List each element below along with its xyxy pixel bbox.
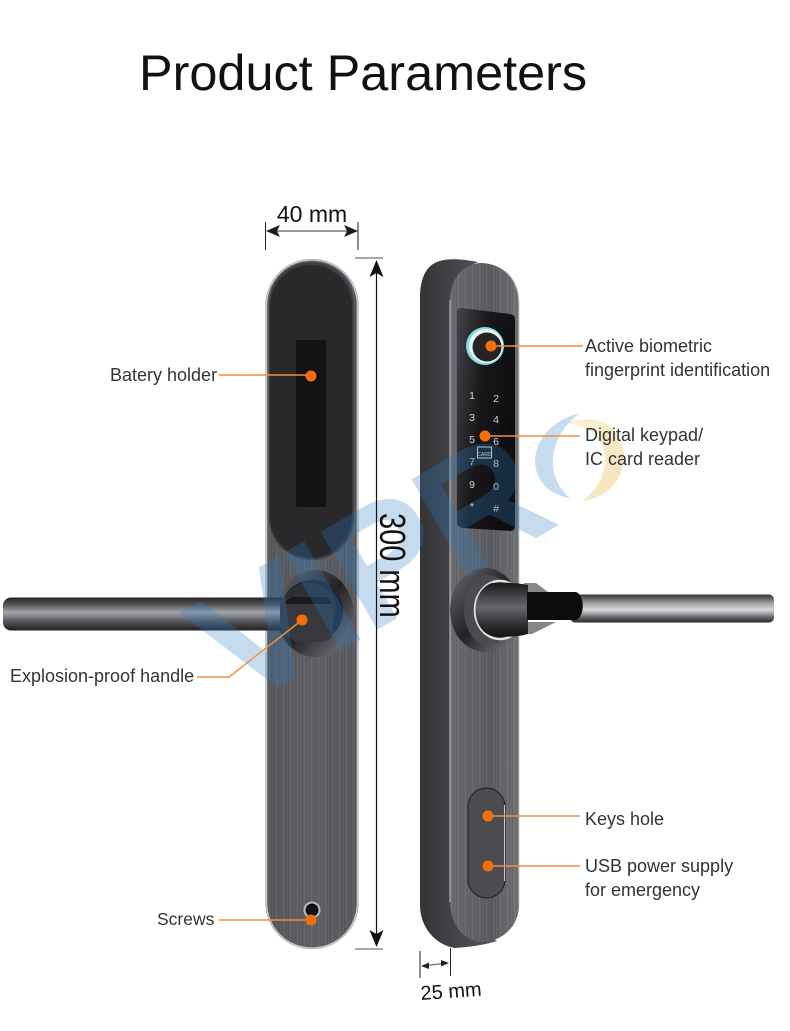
callout: battery holder: Batery holder [110, 365, 217, 385]
dimension: 40 mm [266, 201, 358, 250]
keypad digits: * [470, 500, 475, 514]
keypad digits: 7 [469, 456, 475, 468]
watermark wordmark: VIPR [170, 402, 573, 734]
callout: fingerprint identification [486, 336, 770, 380]
keypad digits: 0 [493, 481, 499, 493]
dimension: 40 mm: 40 mm [277, 201, 347, 227]
keypad digits: 4 [493, 414, 499, 426]
left handle rose [276, 570, 354, 657]
callout: fingerprint identification: fingerprint identification [585, 360, 770, 380]
watermark blue crescent [535, 413, 580, 498]
right handle rose [450, 568, 525, 652]
keypad digits: 3 [469, 412, 475, 424]
left lock plate [266, 259, 358, 949]
keypad digits [469, 390, 499, 515]
right handle [476, 583, 774, 637]
callout: explosion-proof handle: Explosion-proof handle [10, 666, 194, 686]
callout: digital keypad: Digital keypad/ [585, 425, 703, 445]
battery cover [269, 262, 354, 560]
callout: keys hole: Keys hole [585, 809, 664, 829]
callout: fingerprint identification: Active biometric [585, 336, 712, 356]
callout: keys hole [482, 809, 664, 829]
watermark [170, 402, 624, 734]
dimension: 25 mm: 25 mm [420, 979, 482, 1005]
keypad digits: # [493, 503, 499, 515]
watermark yellow crescent [567, 419, 624, 501]
fingerprint sensor [466, 327, 504, 365]
keypad digits: 9 [469, 479, 475, 491]
title: Product Parameters [139, 44, 587, 101]
left lock: back view [3, 259, 358, 949]
key and usb cover [468, 788, 505, 898]
callout: battery holder [110, 365, 316, 385]
callout: usb power supply: USB power supply [585, 856, 733, 876]
left screw hole [304, 902, 320, 918]
lock front plate [450, 263, 519, 942]
callout: digital keypad [480, 425, 703, 469]
right lock: front view [420, 259, 774, 948]
card reader icon [477, 447, 492, 458]
keypad digits: 8 [493, 458, 499, 470]
dimension: 300 mm [355, 258, 413, 949]
callout: usb power supply [482, 856, 733, 900]
keypad digits: 1 [469, 390, 475, 402]
keypad digits: 2 [493, 393, 499, 405]
callout: usb power supply: for emergency [585, 880, 700, 900]
card reader icon: CARD [477, 452, 492, 458]
battery holder slot [296, 340, 326, 507]
callout: digital keypad: IC card reader [585, 449, 700, 469]
keypad digits: 5 [469, 434, 475, 446]
left handle bar [3, 597, 333, 642]
lock side edge [420, 259, 497, 948]
keypad panel [457, 308, 515, 531]
keypad digits: 6 [493, 436, 499, 448]
callout: screws: Screws [157, 909, 215, 929]
callout: screws [157, 909, 316, 929]
callout: explosion-proof handle [10, 614, 308, 686]
dimension: 25 mm [420, 948, 482, 1005]
dimension: 300 mm: 300 mm [372, 513, 413, 618]
